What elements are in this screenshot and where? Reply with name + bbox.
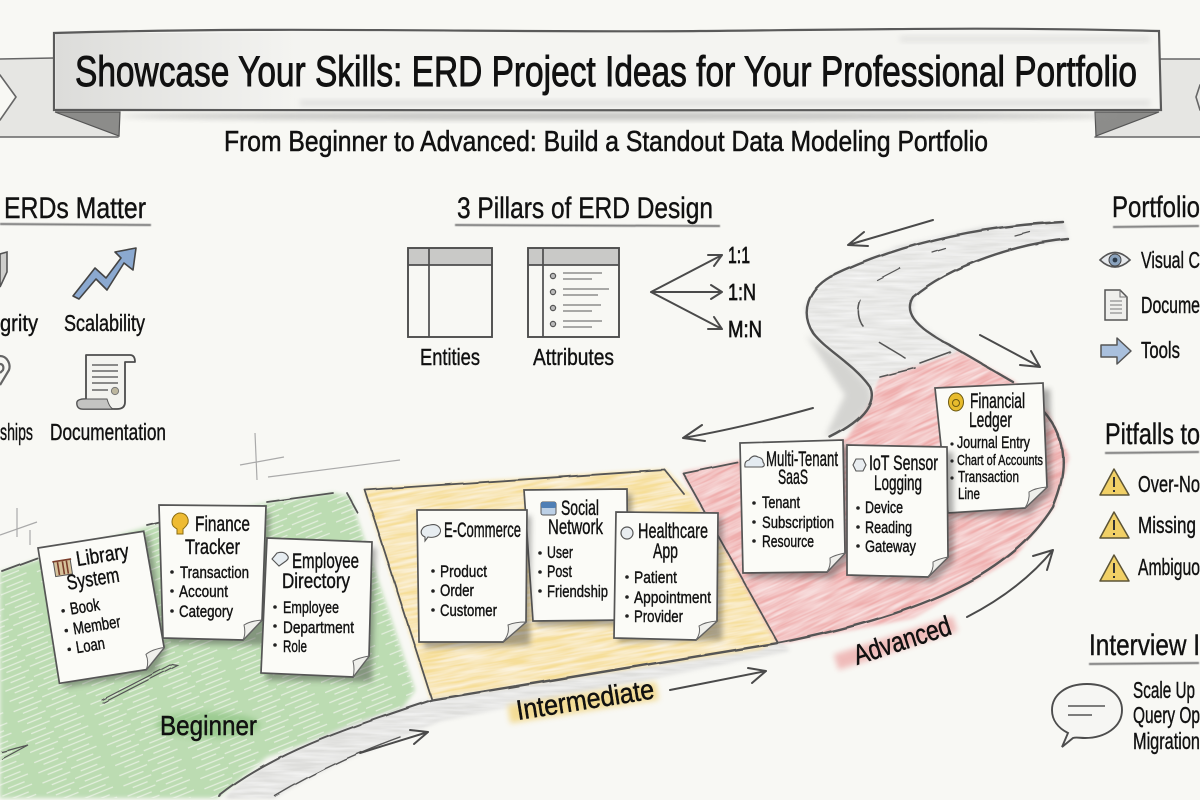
icon: cloud — [745, 456, 764, 467]
project note: social network — [524, 489, 632, 626]
road edge lines — [2, 222, 1068, 796]
project note: healthcare app: Patient — [634, 568, 677, 587]
project note: financial ledger: Journal Entry — [957, 433, 1030, 452]
project note: healthcare app: Appointment — [634, 588, 711, 607]
project note: iot sensor logging — [847, 445, 954, 582]
left road shading — [806, 335, 872, 437]
project note: employee directory: Employee — [292, 550, 359, 573]
arrow: advanced direction — [967, 550, 1053, 617]
icon: entities table — [408, 248, 492, 337]
project note: finance tracker: Category — [179, 602, 233, 621]
icon: hexagon sensor — [853, 459, 866, 471]
beginner road section — [0, 493, 415, 798]
panel: portfolio — [1100, 191, 1200, 364]
project note: multi-tenant saas: Tenant — [762, 493, 800, 512]
label: advanced: Advanced — [849, 610, 955, 671]
project note: multi-tenant saas — [740, 440, 851, 578]
panel: interview — [1052, 629, 1200, 754]
project note: employee directory — [261, 538, 376, 682]
project note: financial ledger: Chart of Accounts — [957, 452, 1043, 469]
label: entities: Entities — [420, 344, 480, 370]
project note: multi-tenant saas: Multi-Tenant — [766, 448, 838, 471]
icon: social window — [541, 502, 556, 515]
project note: e-commerce: Customer — [440, 601, 497, 620]
project note: library system: Loan — [75, 634, 106, 657]
project note: finance tracker: Tracker — [185, 536, 240, 559]
project note: healthcare app — [614, 512, 723, 642]
icon: scroll document — [77, 355, 135, 409]
icon: attributes table — [528, 248, 619, 337]
panel: 3 pillars of ERD design — [408, 192, 762, 370]
heading: ERDs matter: ERDs Matter — [4, 192, 146, 225]
project note: financial ledger: Transaction — [958, 469, 1019, 486]
project note: healthcare app: Provider — [634, 607, 683, 626]
label: scalability: Scalability — [64, 310, 145, 336]
project note: multi-tenant saas: Resource — [762, 532, 814, 551]
project note: employee directory: Directory — [282, 570, 350, 593]
project note: finance tracker — [159, 505, 270, 645]
project note: finance tracker: Finance — [195, 513, 250, 536]
label: advanced — [831, 608, 960, 677]
project note: iot sensor logging: Reading — [865, 518, 912, 537]
icon: gold coin — [948, 393, 964, 411]
project note: library system: System — [65, 564, 121, 595]
panel: pitfalls — [1100, 418, 1200, 581]
project note: employee directory: Department — [283, 618, 354, 637]
label: 1:1: 1:1 — [728, 242, 750, 268]
icon: shield — [0, 252, 7, 287]
label: intermediate: Intermediate — [514, 674, 656, 726]
project note: multi-tenant saas: Subscription — [762, 513, 834, 532]
project note: e-commerce: Product — [440, 562, 487, 581]
project note: finance tracker: Account — [179, 582, 228, 601]
project note: social network: Friendship — [547, 582, 608, 601]
icon: document — [1105, 290, 1127, 320]
project note: iot sensor logging: Gateway — [865, 537, 916, 556]
panel: why ERDs matter — [0, 192, 166, 445]
heading: 3 pillars: 3 Pillars of ERD Design — [457, 192, 713, 225]
title banner — [0, 29, 1200, 137]
project note: multi-tenant saas: SaaS — [778, 466, 808, 489]
lower gray road — [225, 643, 790, 798]
icon: chat cloud — [421, 525, 441, 541]
banner right tail — [1095, 59, 1200, 137]
icon: employee cloud — [272, 552, 288, 566]
advanced road section — [572, 205, 1179, 790]
project note: iot sensor logging: Logging — [874, 472, 922, 495]
icon: speech bubble — [1052, 684, 1122, 747]
sketch guide lines — [0, 433, 400, 545]
label: tools: Tools — [1141, 337, 1180, 363]
label: relationships: ships — [0, 419, 33, 445]
project note: financial ledger: Financial — [970, 390, 1025, 413]
banner face — [54, 29, 1161, 111]
label: integrity: grity — [0, 310, 38, 336]
project note: library system: Book — [68, 595, 101, 619]
icon: tools arrow — [1101, 338, 1131, 364]
chart: skill road — [0, 205, 1179, 798]
project note: employee directory: Role — [283, 637, 307, 656]
subtitle: From Beginner to Advanced: Build a Standout Data Modeling Portfolio — [224, 126, 988, 158]
project note: social network: Social — [561, 497, 599, 520]
intermediate road section — [326, 399, 819, 771]
arrow: road direction left — [683, 408, 813, 441]
label: attributes: Attributes — [533, 344, 614, 370]
project note: social network: Network — [548, 516, 603, 539]
project note: healthcare app: App — [653, 540, 678, 563]
arrow: road direction top — [848, 220, 933, 246]
project note: healthcare app: Healthcare — [638, 520, 708, 543]
project note: library system: Library — [74, 540, 131, 571]
icon: relationship link — [0, 356, 10, 385]
label: M:N: M:N — [728, 316, 762, 342]
project note: finance tracker: Transaction — [180, 563, 249, 582]
project note: financial ledger: Ledger — [969, 409, 1012, 432]
project note: financial ledger: Line — [958, 486, 980, 503]
project note: library system: Member — [72, 612, 122, 638]
arrow: beginner direction — [360, 730, 428, 753]
project note: social network: User — [547, 543, 573, 562]
label: documentation: Documentation — [50, 419, 166, 445]
label: 1:N: 1:N — [728, 279, 756, 305]
icon: eye — [1100, 252, 1130, 267]
project note: e-commerce — [417, 510, 531, 648]
icon: cardinality arrows — [651, 255, 722, 329]
icon: library building — [52, 559, 73, 577]
upper gray road — [805, 222, 1068, 387]
project note: financial ledger — [935, 383, 1052, 518]
project note: iot sensor logging: Device — [865, 498, 903, 517]
project note: social network: Post — [547, 562, 572, 581]
project note: e-commerce: Order — [440, 581, 474, 600]
icon: rising arrow — [73, 248, 136, 299]
icon: warning 3 — [1100, 555, 1129, 581]
icon: warning 1 — [1100, 469, 1129, 495]
project note: e-commerce: E-Commerce — [444, 519, 521, 542]
label: beginner: Beginner — [160, 710, 257, 741]
project note: employee directory: Employee — [283, 598, 339, 617]
icon: finance figure — [172, 513, 188, 534]
arrow: intermediate direction — [670, 668, 766, 690]
icon: health circle — [621, 527, 633, 539]
icon: warning 2 — [1100, 512, 1129, 538]
arrow: road direction right — [980, 335, 1040, 367]
project note: library system — [38, 530, 171, 688]
banner left tail — [0, 58, 120, 137]
project note: iot sensor logging: IoT Sensor — [869, 452, 938, 475]
